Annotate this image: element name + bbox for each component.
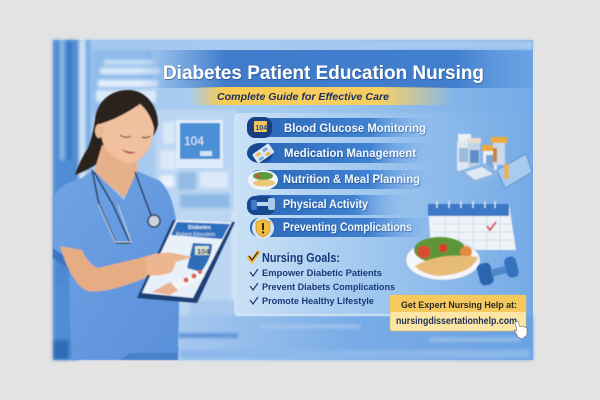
icon: glucose meter: 104 [256,125,267,132]
topic: physical activity: Physical Activity [283,199,369,211]
goal: empower: Empower Diabetic Patients [262,268,382,279]
title: Diabetes Patient Education Nursing [163,62,484,84]
glucose meter on tablet [187,243,212,272]
callout: expert help [390,295,527,339]
ear [95,124,103,138]
scrubs [53,170,180,360]
goals heading: Nursing Goals: [262,251,340,265]
hair and ponytail [75,90,158,175]
nursing goals [248,251,395,307]
topic: nutrition and meal planning: Nutrition & Meal Planning [283,174,420,186]
subtitle ribbon: Complete Guide for Effective Care [217,91,389,103]
hospital background scene [53,40,533,360]
title banner [140,50,533,88]
illustration: calendar [428,201,516,250]
icon: pill blister pack [247,143,275,164]
goal: promote: Promote Healthy Lifestyle [262,296,374,307]
topic: medication management: Medication Management [284,148,416,160]
stethoscope [92,170,152,243]
smile [121,149,136,154]
topic: blood glucose monitoring: Blood Glucose Monitoring [284,123,426,135]
neck [94,145,138,198]
illustration: dumbbell [476,255,520,287]
goal: prevent: Prevent Diabets Complications [262,282,395,293]
illustration: meal plate [406,237,480,280]
icon: hand cursor [514,321,527,339]
subtitle ribbon [190,87,453,105]
callout: expert help: Get Expert Nursing Help at: [401,300,517,311]
icon: glucose meter [247,117,272,138]
tablet with patient education: Diabetes [188,225,211,231]
callout: expert help: nursingdissertationhelp.com [396,316,517,327]
topic: physical activity [247,195,410,215]
tablet with patient education: 104 [197,247,210,256]
panel: topics list [247,117,435,239]
tablet with patient education: Patient Education [176,232,215,238]
topic: preventing complications: Preventing Complications [283,222,412,234]
topic: preventing complications [250,217,435,239]
topic: blood glucose monitoring [247,117,435,138]
test strip [168,271,205,291]
wall monitor [176,120,223,168]
left arm [60,246,190,292]
wall monitor: 104 [184,134,204,148]
illustration: medicine bottles and pill organizer [456,134,532,188]
topic: nutrition and meal planning [248,170,435,190]
tablet header [171,222,230,239]
topic: medication management [247,143,435,164]
icon: dumbbell [247,196,275,215]
hand pointing at tablet [146,253,192,276]
red check mark [487,222,496,230]
nurse figure [53,90,190,360]
icon: warning shield [252,217,274,239]
tablet with patient education [137,220,235,303]
light horizontal rule [236,314,426,316]
icon: meal plate [248,170,278,190]
panel: content [234,113,533,315]
face [100,104,154,163]
